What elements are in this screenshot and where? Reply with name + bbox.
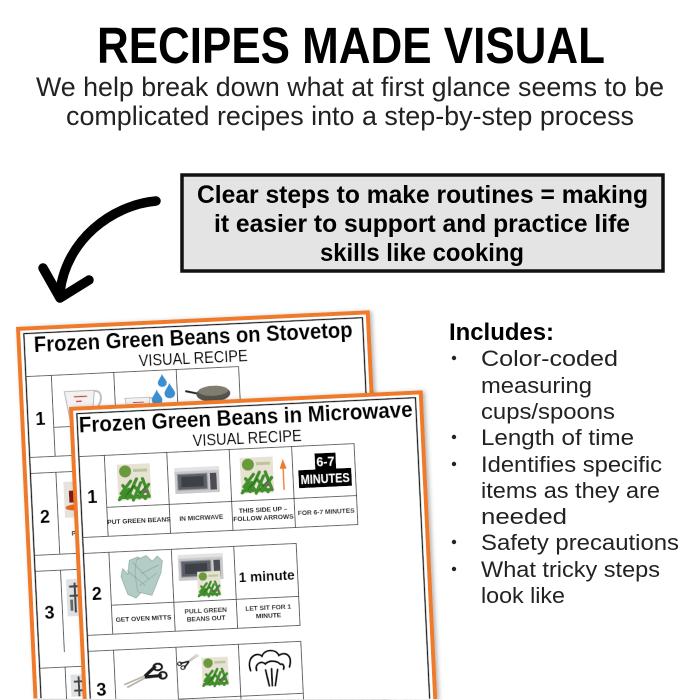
recipe grid: 3 [44, 603, 55, 623]
step 1: 1 [87, 487, 98, 507]
step 2: MINUTE [256, 612, 282, 620]
bullet: specific items [452, 452, 662, 529]
bullet: measuring cups: measuring [481, 373, 592, 398]
bullet: tricky steps: look like [481, 583, 565, 608]
includes heading: Includes: [449, 319, 554, 346]
includes list [449, 319, 679, 608]
sheet subtitle: VISUAL RECIPE [138, 346, 248, 370]
recipe grid: ON [81, 539, 92, 546]
title: RECIPES MADE VISUAL [97, 17, 605, 74]
icon: steam [249, 650, 291, 687]
step 1: THIS SIDE UP – [239, 506, 288, 515]
bullet: measuring cups [452, 346, 618, 424]
step 2: 2 [91, 584, 102, 604]
panel: stovetop recipe sheet [16, 310, 388, 700]
step 2: 1 minute [238, 568, 296, 585]
bullet: measuring cups: Color-coded [481, 346, 618, 371]
recipe grid: 2 [40, 507, 50, 527]
recipe grid: ADD [76, 437, 91, 444]
time label: 6-7 minutes: MINUTES [300, 470, 350, 487]
bullet: safety: Safety precautions [481, 530, 679, 555]
callout: skills like cooking [320, 239, 524, 267]
bullet: specific items: items as they are [481, 478, 660, 503]
recipe grid: PUT POT [71, 529, 100, 538]
callout [182, 175, 663, 271]
sheet title: Frozen Green Beans in Microwave [78, 397, 413, 438]
callout: it easier to support and practice life [214, 210, 630, 238]
step 2: LET SIT FOR 1 [245, 604, 292, 613]
sheet title: Frozen Green Beans on Stovetop [33, 317, 353, 357]
step 2: PULL GREEN [184, 607, 227, 616]
recipe grid [26, 364, 316, 700]
time label: 6-7 minutes: 6-7 [316, 455, 335, 469]
icon: pot on stove [63, 481, 89, 518]
panel: microwave recipe sheet [69, 390, 437, 700]
step 1: PUT GREEN BEANS [107, 516, 171, 526]
subtitle text: complicated recipes into a step-by-step process [66, 101, 634, 131]
icon: frying pan [185, 385, 231, 403]
bullet: specific items: Identifies specific [481, 452, 662, 477]
recipe grid: 1 [35, 409, 46, 429]
step 1 [79, 444, 358, 538]
step 1: FOR 6-7 MINUTES [298, 508, 355, 517]
subtitle text: We help break down what at first glance seems to be [36, 72, 664, 102]
bullet: tricky steps [452, 557, 660, 608]
bullet: tricky steps: What tricky steps [481, 557, 660, 582]
bullet: specific items: needed [481, 504, 567, 529]
step 3 [88, 641, 304, 700]
callout: Clear steps to make routines = making [197, 181, 648, 209]
time label: 6-7 minutes [297, 452, 352, 488]
recipe grid: WITH [86, 627, 103, 635]
sheet subtitle: VISUAL RECIPE [192, 426, 302, 450]
icon: cooling rack [70, 674, 99, 697]
subtitle text [36, 72, 664, 131]
icon: orange up arrow [280, 461, 287, 490]
bullet: time: Length of time [481, 425, 634, 450]
step 2: GET OVEN MITTS [116, 614, 172, 624]
step 2 [83, 543, 300, 635]
step 2: BEANS OUT [187, 615, 226, 624]
step 3: 3 [96, 680, 107, 700]
icon: oven mitts [120, 555, 164, 599]
step 1: IN MICRWAVE [179, 514, 224, 523]
arrow [43, 201, 156, 298]
step 1: FOLLOW ARROWS [233, 514, 294, 523]
bullet: measuring cups: cups/spoons [481, 399, 615, 424]
